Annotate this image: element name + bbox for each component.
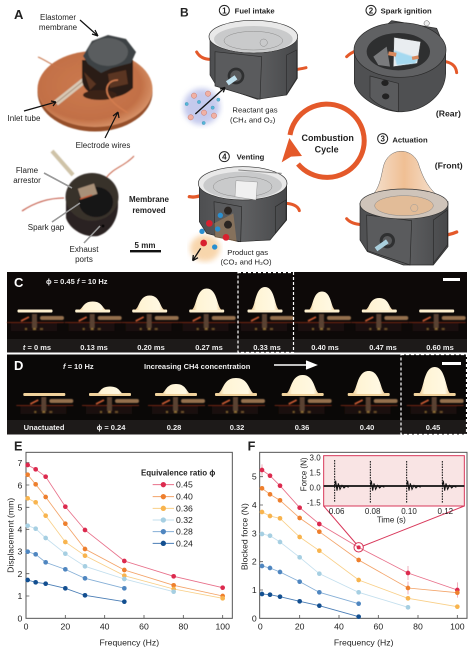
series: [28, 465, 223, 602]
y ticks: 7: [18, 458, 23, 468]
step 4 heading: Venting: [237, 152, 265, 161]
spark chamber: [373, 47, 390, 67]
y ticks: 6: [18, 480, 23, 490]
callout lines: [324, 506, 464, 546]
y ticks: 4: [18, 525, 23, 535]
step 2 heading: 2: [369, 6, 374, 15]
callout marker: [354, 543, 363, 552]
y ticks: 4: [252, 500, 257, 510]
photo: device with membrane removed: [22, 151, 134, 236]
x ticks: 80: [413, 621, 423, 631]
axes: [260, 452, 467, 618]
series: [262, 470, 457, 617]
concentration labels: 0.32: [230, 423, 244, 432]
inset x ticks: 0.12: [438, 507, 454, 516]
y ticks: [252, 472, 257, 623]
step 1: fuel intake: [183, 5, 306, 125]
y ticks: 0: [18, 613, 23, 623]
inflated membrane: [360, 151, 448, 214]
panel E: displacement chart: [6, 440, 232, 647]
x ticks: 40: [334, 621, 344, 631]
panel label F: F: [248, 440, 256, 454]
product gas label: Product gas: [227, 248, 268, 257]
wires: [347, 219, 362, 225]
inset y ticks: -1.5: [307, 499, 321, 508]
x ticks: 20: [61, 621, 70, 631]
cycle arrow: [282, 104, 364, 177]
x ticks: 100: [450, 621, 465, 631]
electrode wire: [107, 80, 128, 113]
wires: [189, 195, 202, 197]
cycle label: Combustion: [301, 133, 354, 143]
inset trace: [324, 460, 464, 503]
legend: Equivalence ratio ϕ: [141, 468, 215, 477]
x ticks: 0: [24, 621, 29, 631]
concentration labels: 0.45: [426, 423, 440, 432]
y ticks: 5: [252, 472, 257, 482]
coin: [38, 52, 152, 132]
inset force chart: [299, 454, 464, 525]
arrow to arrestor: [44, 173, 72, 188]
reactant gas label: Reactant gas: [232, 106, 278, 115]
concentration labels: 0.28: [167, 423, 181, 432]
body: [210, 35, 297, 99]
photo: device on a coin: [38, 35, 152, 132]
label flame arrestor: Flame: [16, 166, 39, 175]
step 3 heading: 3: [380, 135, 385, 144]
step 3 heading: [378, 134, 428, 144]
time labels: 0.40 ms: [311, 343, 339, 352]
label membrane removed: Membrane: [129, 195, 170, 204]
panel B: combustion cycle: [180, 5, 463, 266]
inset x ticks: [329, 507, 454, 516]
x ticks: 0: [258, 621, 263, 631]
parameters: ϕ = 0.45 f = 10 Hz: [46, 277, 108, 286]
panel label B: B: [180, 6, 189, 20]
legend: 0.24: [176, 538, 193, 548]
axes: [26, 452, 232, 618]
x ticks: 40: [100, 621, 110, 631]
arrow to wires: [105, 112, 119, 138]
concentration labels: [24, 423, 440, 432]
arrow to spark gap: [52, 203, 80, 222]
exhaust arrow: [193, 248, 201, 261]
inset y ticks: 3.0: [310, 454, 321, 463]
reactant gas label: (CH₄ and O₂): [230, 116, 276, 125]
rear label: (Rear): [436, 108, 461, 118]
device body: [82, 60, 133, 98]
gas arrow: [195, 87, 225, 114]
cycle label: Cycle: [315, 145, 339, 155]
panel A: device photos: ports: [75, 255, 93, 264]
panel label A: A: [14, 7, 24, 22]
x ticks: 20: [295, 621, 305, 631]
axis titles: Frequency (Hz): [334, 637, 394, 647]
y ticks: 3: [252, 528, 257, 538]
label electrode wires: Electrode wires: [76, 141, 130, 150]
top: [198, 167, 287, 200]
arrow to inlet tube: [24, 101, 56, 111]
time labels: 0.60 ms: [426, 343, 454, 352]
arrow: [274, 361, 316, 369]
panel label C: C: [14, 275, 24, 290]
x ticks: [258, 621, 465, 631]
y ticks: 3: [18, 547, 23, 557]
wires: [347, 51, 357, 57]
label exhaust ports: Exhaust: [70, 245, 99, 254]
inset y ticks: 0.0: [310, 484, 321, 493]
molecules: [200, 220, 229, 246]
x ticks: 60: [139, 621, 149, 631]
legend: 0.28: [176, 527, 193, 537]
panel E: displacement chart: Displacement (mm): [6, 498, 16, 573]
inset y ticks: [307, 454, 321, 508]
panel A: device photos: membrane: [39, 23, 78, 32]
body: [354, 21, 446, 112]
y ticks: 2: [18, 569, 23, 579]
step 1 heading: [219, 5, 275, 15]
highlighted frame: [401, 354, 466, 434]
y ticks: 5: [18, 502, 23, 512]
legend: 0.36: [176, 503, 193, 513]
legend: 0.40: [176, 492, 193, 502]
product gas label: (CO₂ and H₂O): [220, 257, 272, 266]
inset x ticks: 0.10: [401, 507, 417, 516]
label inlet tube: Inlet tube: [8, 114, 41, 123]
wire back left: [38, 57, 82, 69]
step 4: venting: [189, 152, 299, 266]
label elastomer membrane: Elastomer: [40, 13, 76, 22]
ports: [224, 207, 232, 215]
x ticks: 80: [179, 621, 188, 631]
time labels: 0.13 ms: [80, 343, 108, 352]
x ticks: 100: [215, 621, 230, 631]
inset x ticks: 0.08: [365, 507, 381, 516]
y ticks: [18, 458, 23, 623]
time labels: t = 0 ms: [23, 343, 51, 352]
step 2 heading: [366, 5, 432, 15]
frames: [16, 367, 464, 414]
panel label E: E: [14, 440, 22, 454]
scale bar: [442, 362, 461, 365]
time labels: 0.33 ms: [253, 343, 281, 352]
inlet: [380, 233, 395, 248]
y ticks: 2: [252, 557, 257, 567]
error bars: [262, 464, 457, 598]
concentration labels: Unactuated: [24, 423, 65, 432]
time labels: 0.47 ms: [369, 343, 397, 352]
scale bar 5 mm: 5 mm: [135, 241, 155, 250]
panel A: device photos: removed: [132, 206, 166, 215]
reactant gas label: [230, 106, 278, 125]
step 4 heading: 4: [222, 153, 227, 162]
front label: (Front): [435, 161, 463, 171]
time labels: 0.27 ms: [195, 343, 223, 352]
concentration labels: ϕ = 0.24: [97, 423, 126, 432]
product gas label: [220, 248, 272, 266]
frames: [7, 287, 466, 331]
body: [199, 182, 287, 242]
step 3: actuation: [347, 134, 463, 265]
rear panel: [370, 76, 398, 112]
step 4 heading: [219, 152, 265, 162]
arrow to membrane: [80, 20, 98, 36]
inset x ticks: 0.06: [329, 507, 345, 516]
panel C: high-speed frames over time: [7, 272, 467, 352]
concentration label: Increasing CH4 concentration: [144, 362, 251, 371]
gas cloud: [183, 88, 220, 125]
inlet tube: [56, 79, 86, 103]
legend: 0.32: [176, 515, 193, 525]
wires: [197, 52, 211, 59]
panel F: blocked force chart: Blocked force (N): [240, 503, 250, 570]
panel F: blocked force chart: [240, 440, 467, 647]
scale bar 5 mm: [130, 241, 161, 252]
legend: 0.45: [176, 480, 193, 490]
cycle label: [301, 133, 354, 155]
body: [360, 203, 448, 265]
panel A: device photos: arrestor: [13, 176, 41, 185]
scale bar: [443, 278, 460, 281]
panel label D: D: [14, 358, 23, 373]
panel D: frames by concentration: [7, 354, 467, 434]
inset force chart: Force (N): [299, 457, 308, 491]
y ticks: 1: [18, 591, 23, 601]
exhaust glow: [190, 235, 220, 262]
step 1 heading: Fuel intake: [235, 6, 275, 15]
step 1 heading: 1: [222, 6, 227, 15]
top rim: [209, 20, 298, 53]
inlet: [228, 68, 244, 84]
concentration labels: 0.40: [360, 423, 374, 432]
inset axis titles: Time (s): [377, 516, 406, 525]
label spark gap: Spark gap: [28, 223, 65, 232]
x ticks: 60: [374, 621, 383, 631]
device top membrane: [83, 35, 136, 73]
step 2 heading: Spark ignition: [381, 6, 432, 15]
inset y ticks: 1.5: [310, 469, 321, 478]
frequency label: f = 10 Hz: [63, 362, 94, 371]
x ticks: [24, 621, 230, 631]
y ticks: 0: [252, 613, 257, 623]
time labels: [23, 343, 454, 352]
molecules: [188, 91, 217, 120]
concentration labels: 0.36: [295, 423, 309, 432]
legend: [141, 468, 215, 548]
step 3 heading: Actuation: [392, 135, 428, 144]
step 2: spark ignition: [347, 5, 461, 118]
panel A: device photos: [8, 7, 170, 264]
axis titles: Frequency (Hz): [100, 637, 159, 647]
arrow to exhaust ports: [84, 226, 100, 243]
highlighted frame: [238, 272, 294, 352]
y ticks: 1: [252, 585, 257, 595]
time labels: 0.20 ms: [137, 343, 165, 352]
